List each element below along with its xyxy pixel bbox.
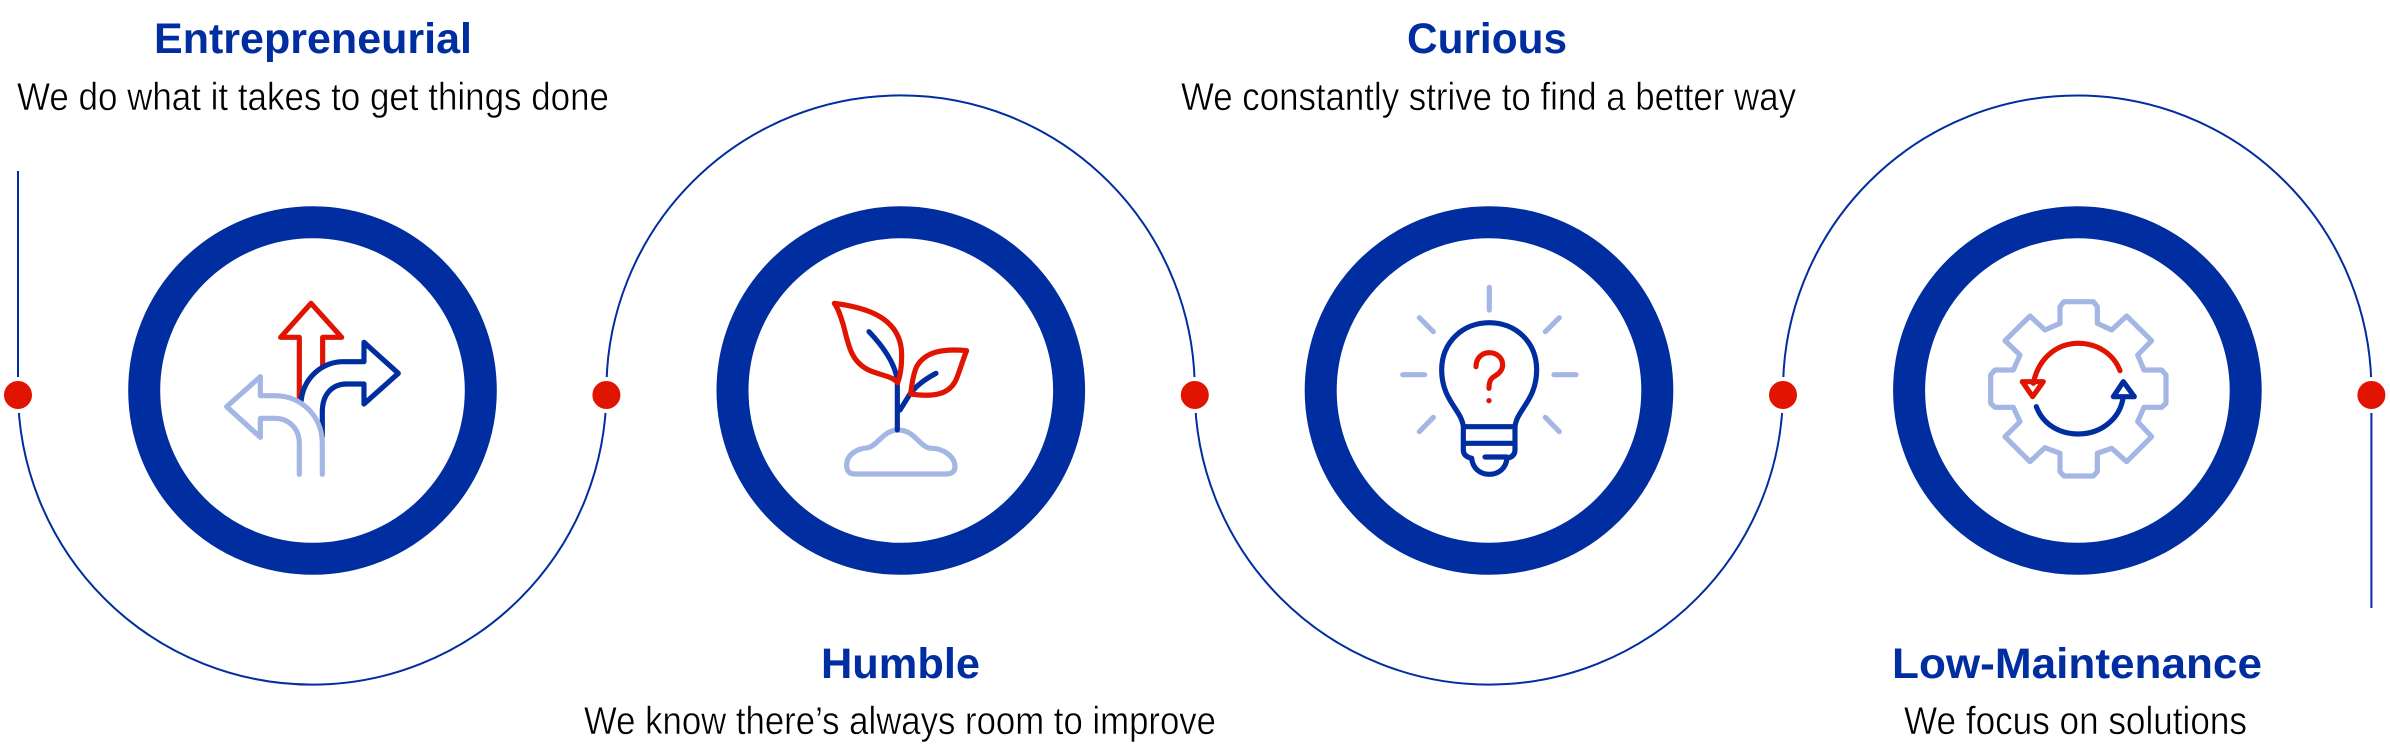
timeline dot 4 <box>1767 379 1799 411</box>
connecting wave line <box>18 95 2371 685</box>
timeline dot 1 <box>2 379 34 411</box>
text: Humble description: We know there’s always room to improve <box>584 700 1216 743</box>
heading: Curious: Curious <box>1407 15 1567 63</box>
ring: Humble <box>732 222 1069 559</box>
text: Low-Maintenance description: We focus on solutions <box>1904 700 2247 743</box>
ring: Entrepreneurial <box>144 222 481 559</box>
timeline dot 5 <box>2355 379 2387 411</box>
text: Entrepreneurial description: We do what it takes to get things done <box>17 76 609 119</box>
icon: light bulb with question mark <box>1403 287 1576 474</box>
heading: Entrepreneurial: Entrepreneurial <box>154 15 472 63</box>
icon: gear with cycle arrows <box>1991 302 2166 476</box>
timeline dot 2 <box>590 379 622 411</box>
icon: diverging arrows <box>227 303 398 474</box>
icon: sprouting plant <box>834 303 967 474</box>
ring: Low-Maintenance <box>1909 222 2246 559</box>
heading: Humble: Humble <box>821 640 980 688</box>
timeline dot 3 <box>1179 379 1211 411</box>
text: Curious description: We constantly strive to find a better way <box>1181 76 1796 119</box>
heading: Low-Maintenance: Low-Maintenance <box>1892 640 2262 688</box>
ring: Curious <box>1321 222 1657 559</box>
